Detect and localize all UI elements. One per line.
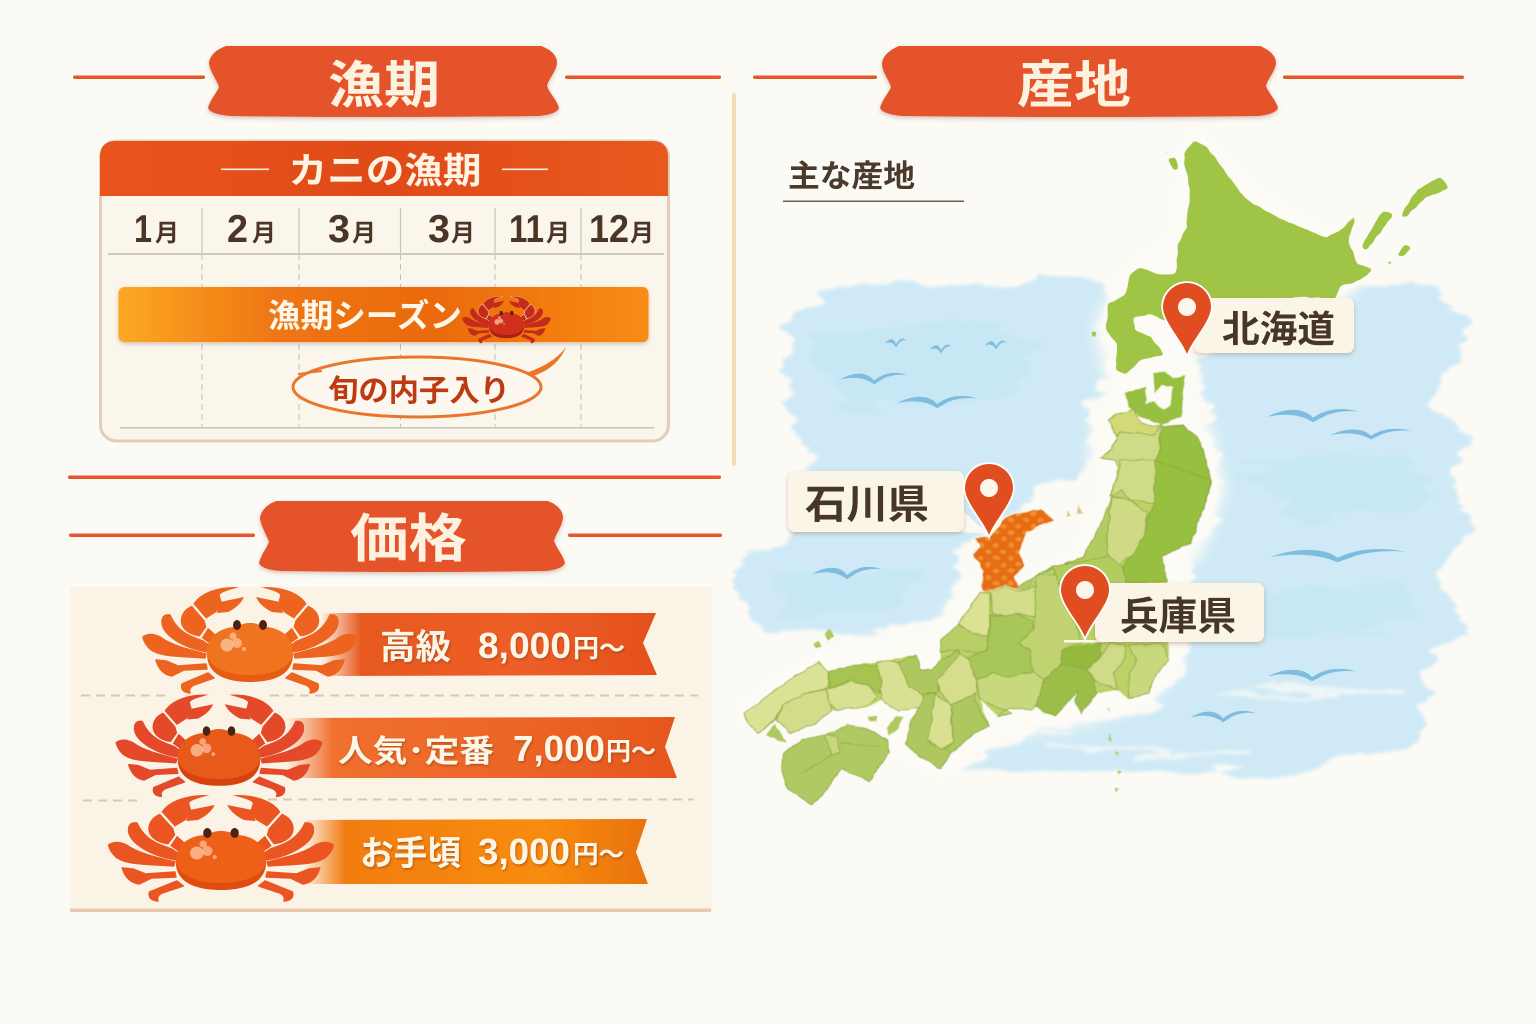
map: sea watercolor <box>733 273 1478 775</box>
label: 石川県: 石川県 <box>805 483 929 527</box>
icon: crab 1 <box>143 587 357 693</box>
season bar: 漁期シーズン <box>268 297 462 334</box>
month labels: 12 <box>589 208 629 251</box>
label: 兵庫県: 兵庫県 <box>1120 596 1236 639</box>
ribbon: お手頃 3,000円: 円～ <box>573 841 624 869</box>
heading: 漁期: 漁期 <box>328 57 440 114</box>
month labels: 月 <box>546 220 570 247</box>
map: Honshu, Shikoku prefectures <box>744 460 1210 805</box>
map: Tohoku north <box>1100 372 1212 510</box>
ribbon: 高級 8,000円 <box>321 613 657 676</box>
ribbon: 高級 8,000円: 高級 <box>380 628 451 667</box>
heading: 価格 <box>69 501 722 572</box>
heading: 価格: 価格 <box>350 511 467 569</box>
map: Ishikawa highlighted <box>973 510 1053 592</box>
ribbon: 人気・定番 7,000円: 7,000 <box>513 728 605 769</box>
icon: crab 3 <box>109 795 333 901</box>
month labels: 11 <box>509 208 544 251</box>
map: Hokkaido <box>1090 140 1449 375</box>
panel: カニの漁期 calendar <box>100 141 668 441</box>
label: 兵庫県 <box>1061 566 1264 642</box>
icon: crab 2 <box>116 694 322 796</box>
icon: small crab on bar <box>463 296 550 343</box>
ribbon: 人気・定番 7,000円: 人気･定番 <box>338 734 494 769</box>
month labels: 2 <box>227 208 248 251</box>
month labels: 月 <box>352 220 376 247</box>
season bar <box>118 287 648 342</box>
month labels: 月 <box>252 220 276 247</box>
ribbon: お手頃 3,000円: お手頃 <box>360 835 461 873</box>
month labels: 3 <box>328 208 350 251</box>
month labels <box>134 208 654 251</box>
ribbon: お手頃 3,000円 <box>304 819 648 884</box>
pin: 北海道 <box>1163 283 1211 354</box>
calendar header: カニの漁期 <box>288 150 482 191</box>
month labels: 月 <box>155 220 179 247</box>
month labels: 3 <box>428 208 450 251</box>
pin: 兵庫県 <box>1061 566 1109 637</box>
map: white coastal halo <box>744 140 1357 768</box>
month labels: 1 <box>134 208 152 251</box>
label: 北海道 <box>1163 283 1354 354</box>
ribbon: 人気・定番 7,000円 <box>286 717 677 778</box>
ribbon: 高級 8,000円: 8,000 <box>478 625 571 666</box>
label: 石川県 <box>788 464 1013 535</box>
month labels: 月 <box>630 220 654 247</box>
calendar header <box>100 141 668 196</box>
callout: 旬の内子入り: 旬の内子入り <box>328 375 510 408</box>
ribbon: 人気・定番 7,000円: 円～ <box>606 738 656 766</box>
ribbon: 高級 8,000円: 円～ <box>573 635 625 663</box>
heading: 産地: 産地 <box>1017 57 1131 114</box>
label: 北海道: 北海道 <box>1222 309 1335 350</box>
heading: 漁期 <box>73 46 721 117</box>
map: seagulls <box>812 339 1412 722</box>
ribbon: お手頃 3,000円: 3,000 <box>478 831 570 872</box>
heading: 産地 <box>753 46 1464 117</box>
pin: 石川県 <box>965 464 1013 535</box>
panel: price list <box>70 587 712 912</box>
month labels: 月 <box>451 220 475 247</box>
sub-heading: 主な産地: 主な産地 <box>788 159 915 194</box>
callout: 旬の内子入り <box>293 347 566 417</box>
